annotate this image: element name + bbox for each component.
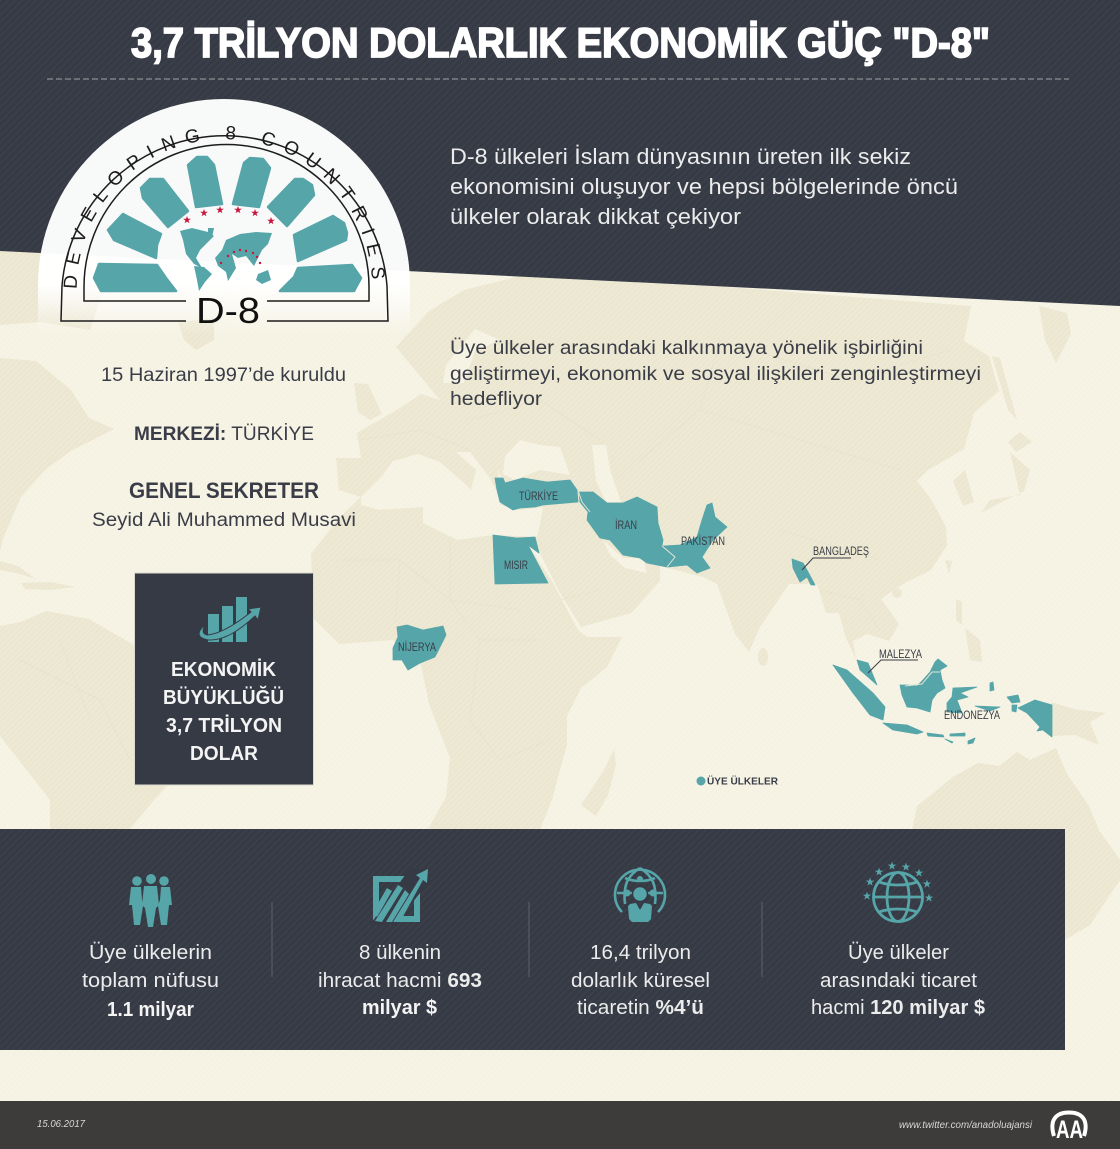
stat: intra trade	[811, 942, 985, 1019]
Pakistan	[663, 503, 727, 573]
intro text: ülkeler olarak dikkat çekiyor	[450, 204, 741, 229]
Mısır	[493, 535, 548, 584]
legend: ÜYE ÜLKELER	[707, 774, 778, 788]
stat: exports: milyar $	[362, 997, 437, 1019]
stat: population: 1.1 milyar	[107, 999, 194, 1021]
country labels: MISIR	[504, 560, 528, 572]
callout: economic size: BÜYÜKLÜĞÜ	[163, 685, 284, 709]
date: 15.06.2017	[37, 1119, 85, 1130]
callout: economic size: 3,7 TRİLYON	[166, 714, 282, 737]
footer	[0, 1101, 1120, 1149]
goals text	[450, 338, 981, 410]
country labels: ENDONEZYA	[944, 710, 1000, 722]
icon: rising bars	[199, 597, 261, 642]
sea stripes	[0, 240, 1120, 1101]
goals text: geliştirmeyi, ekonomik ve sosyal ilişkileri zenginleştirmeyi	[450, 364, 981, 385]
stat: intra trade: arasındaki ticaret	[820, 970, 977, 992]
stat: exports	[318, 942, 482, 1019]
Türkiye	[495, 478, 578, 510]
founding info	[92, 365, 356, 531]
Bangladeş	[792, 559, 815, 585]
source link: www.twitter.com/anadoluajansi	[899, 1119, 1033, 1131]
founding info: 15 Haziran 1997’de kuruldu	[101, 365, 346, 386]
icon: AA logo	[1052, 1112, 1086, 1144]
intro text: D-8 ülkeleri İslam dünyasının üreten ilk sekiz	[450, 144, 911, 169]
founding info: Seyid Ali Muhammed Musavi	[92, 510, 356, 531]
logo D-8: D-8	[196, 290, 260, 331]
country labels: MALEZYA	[879, 649, 922, 661]
callout: economic size: EKONOMİK	[171, 658, 277, 681]
icon: globe with stars	[863, 862, 933, 922]
header background	[0, 0, 1120, 306]
stat: global trade	[571, 942, 710, 1019]
logo red dots	[220, 249, 261, 264]
Nijerya	[393, 625, 446, 670]
country labels: PAKİSTAN	[681, 535, 725, 548]
intro text: ekonomisini oluşuyor ve hepsi bölgelerinde öncü	[450, 174, 958, 199]
country labels: İRAN	[615, 519, 637, 532]
background: map	[0, 240, 1120, 1101]
goals text: hedefliyor	[450, 389, 543, 410]
callout: economic size	[134, 573, 314, 785]
seas	[361, 329, 647, 637]
stat: population: toplam nüfusu	[82, 970, 219, 992]
Malezya	[857, 660, 877, 685]
stat: intra trade: hacmi 120 milyar $	[811, 997, 985, 1019]
country labels	[398, 490, 1000, 722]
founding info: GENEL SEKRETER	[129, 478, 319, 503]
stat: global trade: ticaretin %4’ü	[577, 997, 704, 1019]
callout: economic size: DOLAR	[190, 743, 259, 765]
stat: intra trade: Üye ülkeler	[848, 942, 949, 964]
stat: exports: 8 ülkenin	[359, 942, 441, 964]
country labels: NİJERYA	[398, 641, 436, 654]
stat: exports: ihracat hacmi 693	[318, 970, 482, 992]
land masses	[0, 240, 1120, 940]
country labels: BANGLADEŞ	[813, 546, 869, 558]
intro text	[450, 144, 958, 229]
founding info: MERKEZİ: TÜRKİYE	[134, 424, 314, 445]
Endonezya	[833, 659, 1052, 744]
panel: statistics	[0, 829, 1065, 1050]
internal borders	[578, 490, 940, 686]
logo rays	[94, 157, 361, 291]
stat: global trade: dolarlık küresel	[571, 970, 710, 992]
logo ring text: DEVELOPING 8 COUNTRIES	[64, 126, 385, 288]
country borders	[20, 340, 950, 760]
goals text: Üye ülkeler arasındaki kalkınmaya yönelik işbirliğini	[450, 338, 923, 359]
member countries	[393, 478, 1052, 744]
country labels: TÜRKİYE	[519, 490, 558, 503]
title: 3,7 TRİLYON DOLARLIK EKONOMİK GÜÇ "D-8"	[131, 19, 990, 66]
icon: people	[129, 874, 172, 927]
logo frame	[61, 136, 388, 321]
stat: global trade: 16,4 trilyon	[590, 942, 691, 964]
icon: globe with person	[615, 868, 665, 922]
D-8 logo	[38, 99, 410, 331]
stat: population: Üye ülkelerin	[89, 942, 212, 964]
logo stars	[183, 206, 275, 224]
icon: export chart	[370, 868, 430, 925]
icon: AA logo: AA	[1056, 1116, 1083, 1144]
stat: population	[82, 942, 219, 1021]
logo world map	[180, 228, 272, 291]
İran	[579, 492, 675, 567]
